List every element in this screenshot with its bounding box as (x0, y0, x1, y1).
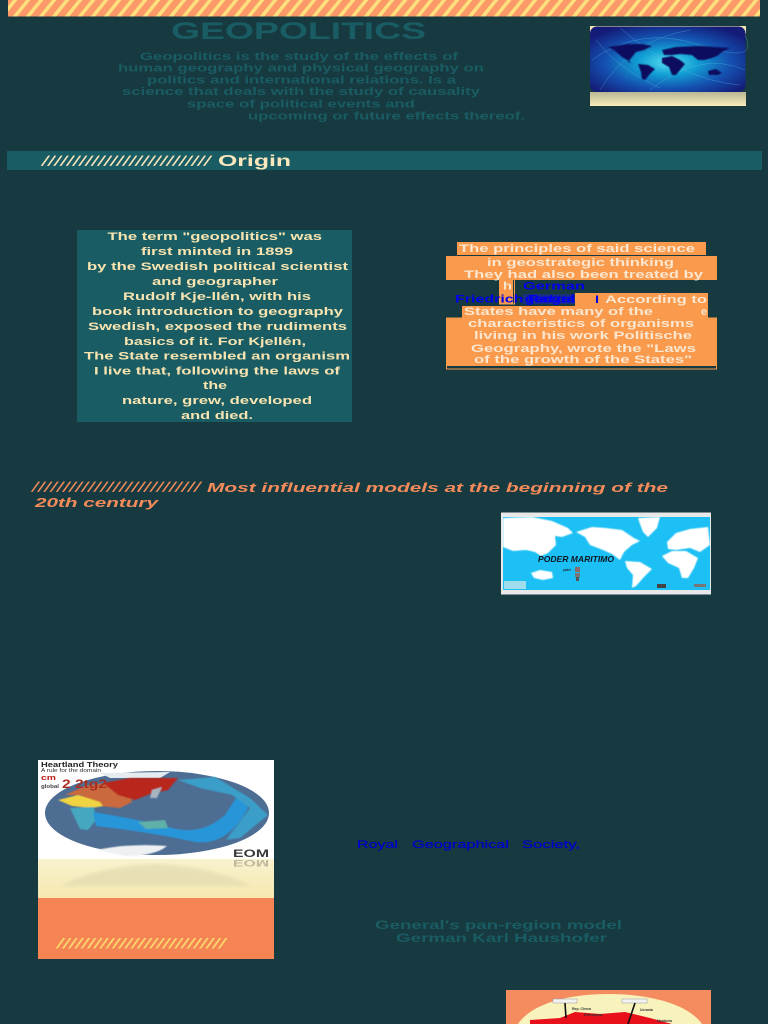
heading: most influential models (29, 480, 668, 510)
image: heartland theory map: A rule for the domain (41, 768, 101, 774)
panel: principles of said science: German (523, 280, 585, 292)
panel: principles of said science: living in his work Politische (474, 330, 692, 342)
heading: most influential models: 20th century (33, 496, 160, 510)
panel: principles of said science: Geography, wrote the "Laws (471, 343, 696, 355)
image: pan-region map (506, 990, 711, 1024)
image: heartland theory map: cm (41, 773, 56, 782)
image: pan-region map: Eslovaquia (584, 1013, 603, 1017)
panel: origin of the term: basics of it. For Kjellén, (124, 336, 306, 348)
panel: principles of said science: They had also been treated by (464, 269, 704, 281)
text block: definition of geopolitics (118, 51, 525, 122)
image: sea power map (501, 512, 711, 594)
text: Royal Geographical Society (357, 839, 580, 851)
logo: EOM: EOM (233, 848, 269, 860)
image: heartland theory map (38, 760, 274, 959)
text: Royal Geographical Society: Geographical (412, 839, 509, 851)
text: Royal Geographical Society: Society, (522, 839, 580, 851)
image: sea power map: poder (563, 568, 572, 572)
image: heartland theory map: EOM (233, 857, 269, 867)
heading: most influential models: Most influential models at the beginning of the (207, 481, 668, 495)
panel: origin of the term: and geographer (152, 276, 279, 288)
panel: origin of the term: nature, grew, developed (122, 395, 312, 407)
panel: origin of the term: The State resembled an organism (84, 350, 350, 362)
heading: Origin: Origin (218, 153, 291, 170)
image: heartland theory map: global (41, 784, 60, 790)
panel: principles of said science: in geostrategic thinking (487, 257, 674, 269)
heading: most influential models: /////////////////////////// (29, 480, 203, 495)
image: glowing world map (590, 26, 748, 106)
panel: origin of the term (77, 230, 352, 422)
text block: definition of geopolitics: Geopolitics is the study of the effects of (140, 51, 459, 63)
title: GEOPOLITICS (171, 18, 426, 45)
panel: origin of the term: first minted in 1899 (141, 246, 293, 258)
text block: definition of geopolitics: politics and international relations. Is a (147, 74, 457, 86)
panel: principles of said science: I (595, 294, 599, 306)
panel: principles of said science (446, 242, 717, 369)
image: pan-region map: Moldavia (657, 1019, 672, 1023)
panel: principles of said science: Friedrich Ratzel (455, 294, 575, 306)
text: pan-region model: German Karl Haushofer (396, 933, 608, 945)
panel: principles of said science: h (503, 280, 512, 292)
image: heartland theory map: 2 2tg2 (62, 777, 107, 791)
text block: definition of geopolitics: space of political events and (187, 98, 415, 110)
panel: origin of the term: book introduction to geography (92, 306, 344, 318)
panel: principles of said science: geogra (525, 294, 576, 306)
text: pan-region model (375, 920, 622, 945)
image: pan-region map: Ucrania (640, 1008, 653, 1012)
text block: definition of geopolitics: human geography and physical geography on (118, 62, 484, 74)
decorative slashes: /////////////////////////// (54, 937, 228, 952)
map title: Heartland Theory: Heartland Theory (41, 760, 119, 769)
panel: principles of said science: The principles of said science (459, 243, 695, 255)
panel: origin of the term: Rudolf Kje-llén, with his (123, 291, 311, 303)
map label: Poder Maritimo: PODER MARITIMO (538, 554, 614, 564)
text: pan-region model: General's pan-region model (375, 920, 622, 932)
panel: origin of the term: the (203, 380, 227, 392)
decorative slashes: /////////////////////////// (39, 154, 213, 169)
text: Royal Geographical Society: Royal (357, 839, 398, 851)
image: pan-region map: Rep. Checa (572, 1007, 591, 1011)
panel: origin of the term: I live that, following the laws of (94, 366, 340, 378)
panel: origin of the term: The term "geopolitics" was (108, 231, 322, 243)
panel: principles of said science: According to (605, 294, 707, 306)
panel: principles of said science: of the growth of the States" (474, 354, 692, 366)
panel: origin of the term: Swedish, exposed the rudiments (88, 321, 347, 333)
panel: principles of said science: e (701, 306, 707, 318)
panel: origin of the term: and died. (181, 410, 253, 422)
text block: definition of geopolitics: science that deals with the study of causality (122, 86, 481, 98)
panel: origin of the term: by the Swedish political scientist (87, 261, 349, 273)
panel: principles of said science: characteristics of organisms (468, 318, 694, 330)
panel: principles of said science: States have many of the (464, 306, 653, 318)
text block: definition of geopolitics: upcoming or future effects thereof. (248, 110, 525, 122)
striped top banner (8, 0, 760, 16)
section header bar: Origin (7, 151, 762, 170)
